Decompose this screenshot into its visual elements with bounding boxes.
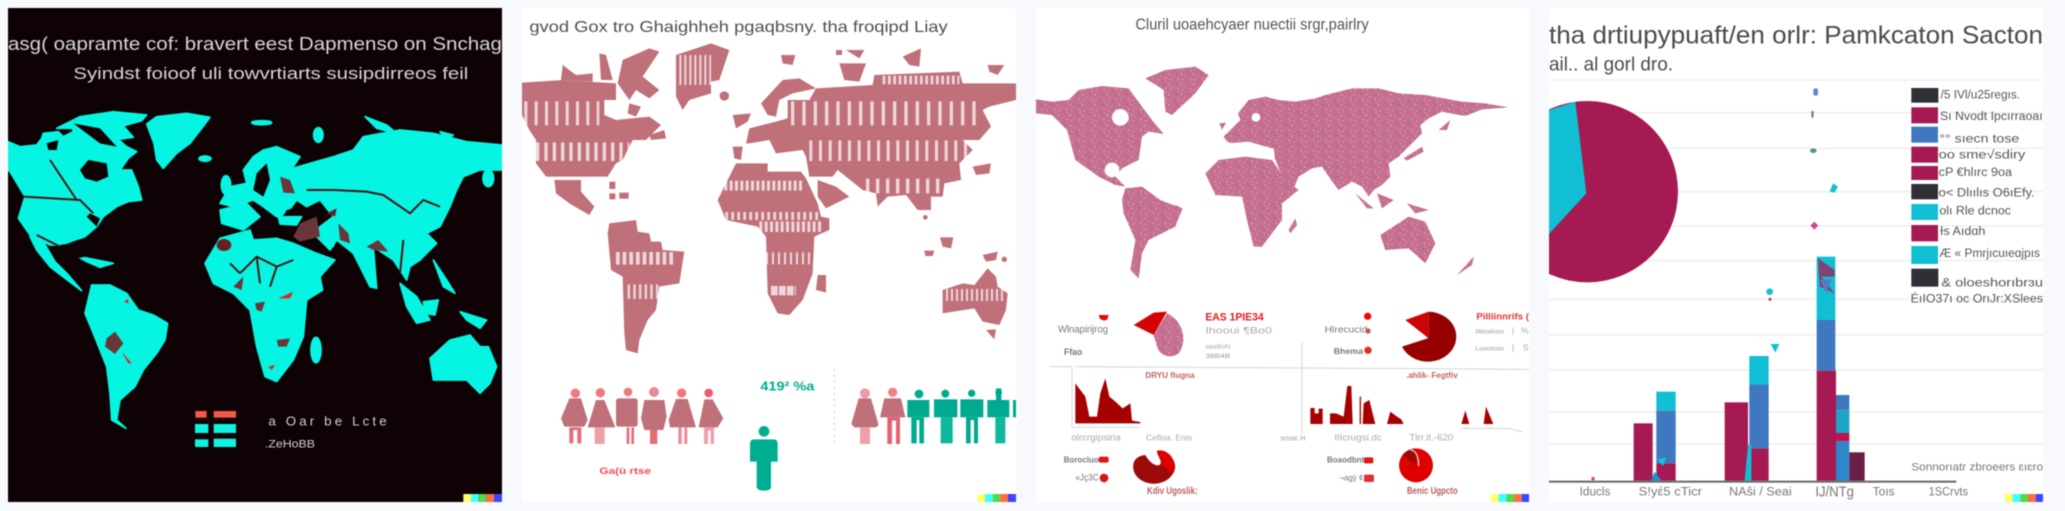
chart: x axis labels: IJ/NTg	[1815, 485, 1854, 501]
chart: lower right pie with labels: Benic Ugpcto	[1407, 486, 1458, 497]
pictogram: single large teal person	[750, 426, 778, 491]
map: lakes and seas	[1105, 109, 1274, 177]
chart: lower left donut with labels: Borocluo	[1064, 456, 1099, 465]
caption: source note: Sonnorıatr zbroeers ɛıɛro	[1911, 462, 2043, 474]
pictogram: rose people group	[561, 387, 723, 444]
chart: x axis labels: S!yέ5 cTicr	[1639, 484, 1702, 498]
chart: upper left pie with labels: aaaBoN	[1205, 344, 1231, 351]
divider: dotted vertical line	[833, 368, 836, 443]
legend: category swatches and labels: cP €hlırc 9oa	[1939, 165, 2012, 179]
chart: lower left donut with labels: Kdiv Ugoslik:	[1147, 486, 1198, 497]
chart: x axis	[1549, 481, 1956, 483]
legend: dark panel swatches and labels: a Oar be Lcte	[268, 414, 387, 429]
mark: colour strip	[463, 494, 502, 502]
legend: category swatches and labels: & oloeshorıbrɜu	[1941, 276, 2043, 290]
chart: upper left pie with labels: EAS 1PIE34	[1205, 312, 1264, 324]
legend: category swatches and labels: °° sıecn tose	[1939, 131, 2020, 145]
chart: lower left donut with labels: «Jç3C	[1075, 473, 1099, 483]
chart: right red bar chart: .ahlik- Fegtfiv	[1406, 370, 1458, 380]
chart: left red area chart: olrcrgipsiria	[1071, 433, 1121, 443]
chart: upper left pie with labels: 38B4B	[1205, 353, 1231, 360]
legend: category swatches and labels: Ɨs Aıdɑh	[1940, 224, 1985, 238]
chart: x axis labels: 1SCrvts	[1929, 484, 1968, 498]
chart: upper right pie with labels	[1325, 311, 1530, 362]
heading: chart panel title	[1549, 21, 2043, 76]
heading: blocky panel title: gvod Gox tro Ghaighheh pgaqbsny. tha froqipd Liay	[529, 19, 948, 36]
legend: dark panel swatches and labels: .ZeHoBB	[265, 438, 315, 450]
chart: upper right pie with labels: Hlrecucid	[1325, 325, 1367, 335]
chart: floating markers	[1591, 88, 1838, 480]
legend: category swatches and labels	[1911, 88, 2043, 306]
chart: left red area chart: DRYU flugna	[1145, 370, 1195, 380]
chart: large pie	[1548, 100, 1679, 284]
legend: category swatches and labels: Sı Nvodt Ipcırraoaı	[1940, 109, 2043, 123]
chart: lower right pie with labels: ¬agỳ ¢	[1339, 473, 1363, 483]
legend: category swatches and labels: o< Dlıılıs O6ıEfy.	[1939, 186, 2035, 200]
map: blocky rose world map	[522, 43, 1016, 353]
chart: stacked bars	[1634, 257, 1865, 481]
heading: chart panel title: tha drtiupypuaft/en orlr: Pamkcaton Sacton	[1549, 21, 2043, 49]
chart: right red bar chart: Tlrr.it.-620	[1409, 433, 1453, 443]
panel: dark world map	[8, 8, 502, 502]
chart: upper left pie with labels	[1058, 312, 1272, 360]
map: cyan world map	[8, 112, 502, 428]
chart: right red bar chart: smsic H	[1280, 434, 1305, 443]
pictogram: mixed rose and teal people row	[851, 388, 1016, 444]
heading: dark panel title: asg( oapramte cof: bravert eest Dapmenso on Snchag	[8, 33, 502, 54]
chart: upper left pie with labels: Ihooui ¶Bo0	[1205, 325, 1272, 335]
caption: red label: Ga(ù rtse	[599, 466, 651, 476]
legend: category swatches and labels: Æ « Pmrjıcuıeɑjpıs	[1939, 246, 2040, 260]
heading: speckled panel title: Cluril uoaehcyaer nuectii srgr,pairlry	[1135, 16, 1369, 33]
chart: upper right pie with labels: | %	[1512, 325, 1529, 335]
chart: x axis labels: Iducls	[1580, 484, 1610, 498]
chart: upper right pie with labels: | S	[1512, 343, 1529, 353]
chart: left red area chart: Cefloa. Enis	[1146, 433, 1193, 443]
legend: dark panel swatches and labels	[195, 411, 387, 450]
map: speckled pink world map	[1036, 67, 1509, 278]
heading: dark panel title	[8, 33, 502, 83]
mark: colour strip	[977, 494, 1016, 502]
chart: x axis labels: Toıs	[1873, 484, 1895, 498]
heading: dark panel title: Syindst foioof uli towvrtiarts susipdirreos feil	[73, 64, 468, 83]
legend: category swatches and labels: ĖıIO37ı oc OrıJr:XSlees	[1911, 292, 2043, 306]
chart: right red bar chart	[1280, 370, 1493, 443]
chart: lower left donut with labels	[1064, 450, 1198, 497]
chart: right red bar chart: lIIcrugsi.dc	[1335, 433, 1382, 443]
mark: colour strip	[1491, 494, 1529, 502]
panel: blocky world map with population pictograms	[522, 8, 1016, 502]
caption: teal label: 419² %a	[760, 380, 815, 394]
map: dark borders and red conflict regions	[23, 123, 440, 370]
chart: upper left pie with labels: Wlnapirijrog	[1058, 325, 1108, 336]
chart: upper right pie with labels: Iliioiioo	[1475, 328, 1504, 335]
chart: upper left pie with labels: Ffao	[1064, 347, 1083, 357]
legend: category swatches and labels: oo sme√sdiry	[1939, 147, 2025, 161]
chart: x axis labels: NAŝi / Seai	[1729, 484, 1792, 498]
legend: category swatches and labels: /5 IVl/u25regıs.	[1941, 88, 2020, 102]
axis lines	[1049, 343, 1529, 434]
chart: lower right pie with labels: Boaodbnt	[1327, 456, 1365, 465]
panel: speckled world map with red charts	[1036, 8, 1530, 502]
heading: chart panel title: ail.. al gorl dro.	[1549, 55, 1673, 76]
mark: colour strip	[2005, 494, 2043, 502]
panel: pie and stacked bar chart	[1548, 24, 2044, 503]
chart: x axis labels	[1580, 484, 1968, 501]
chart: upper right pie with labels: Luooisoo	[1475, 346, 1504, 353]
chart: left red area chart	[1071, 370, 1195, 443]
map: white raster gaps in blocky map	[524, 70, 1006, 295]
grid lines	[1549, 80, 2043, 444]
chart: upper right pie with labels: Pilliinnrifs (	[1476, 311, 1530, 321]
legend: category swatches and labels: olı Rle dcnoc	[1939, 203, 2011, 217]
chart: upper right pie with labels: Bhema	[1334, 346, 1363, 356]
chart: lower right pie with labels	[1327, 448, 1458, 497]
